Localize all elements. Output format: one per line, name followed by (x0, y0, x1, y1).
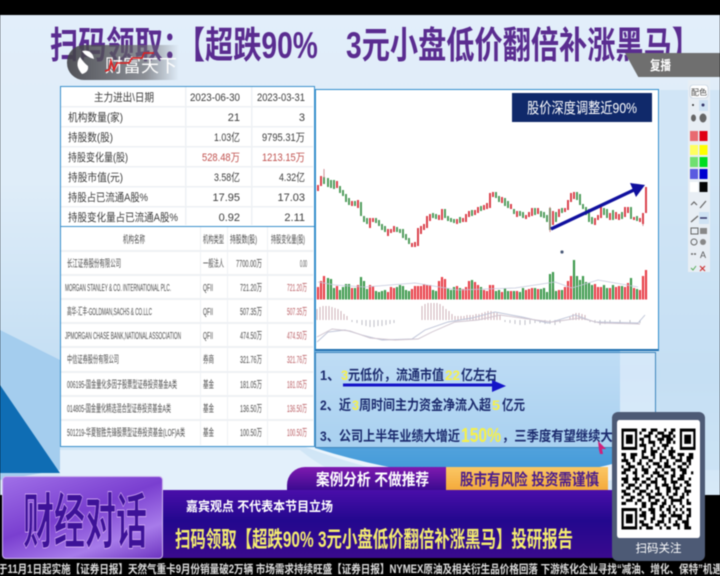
table: holdings summary: 9795.31万 (262, 132, 305, 144)
table: holdings summary: 持股占已流通A股% (68, 190, 148, 204)
table: holdings summary: 持股变化量(股) (68, 150, 128, 164)
tab: risk warning (446, 467, 608, 490)
point 2: 2、近 (320, 397, 351, 413)
table: holdings summary: 持股市值(元) (68, 170, 123, 184)
tab: case analysis: 案例分析 不做推荐 (316, 470, 429, 489)
tab: case analysis (287, 467, 447, 490)
volume bars (318, 260, 646, 299)
candlestick chart (318, 168, 646, 246)
point 2: 亿元 (502, 397, 525, 413)
point 1: 元低价，流通市值 (348, 367, 444, 383)
table: institution list: 507.35万 (240, 307, 262, 318)
small marker (560, 250, 563, 253)
table: institution list: 机构名称 (123, 233, 145, 246)
table: institution list: 501219-华夏智胜先锋股票型证券投资基金(LOF)A类 (67, 426, 185, 439)
replay tag (625, 53, 720, 77)
table: institution list: 014805-国金量化精选混合型证券投资基金A类 (67, 402, 171, 415)
point 3: 150% (461, 425, 501, 447)
QR caption: 扫码关注 (636, 543, 682, 555)
point 3 (320, 425, 625, 447)
table: institution list (60, 226, 315, 447)
table: holdings summary: 17.03 (277, 192, 305, 204)
table: institution list: 一般法人 (203, 257, 224, 270)
table: institution list: 基金 (203, 378, 214, 391)
drawing toolbar: A (700, 250, 706, 260)
table: holdings summary: 0.92 (219, 212, 240, 224)
table: holdings summary: 2023-03-31 (257, 92, 305, 104)
table: institution list: 基金 (203, 426, 214, 439)
table: holdings summary: 持股变化量占已流通A股% (68, 210, 178, 224)
table: institution list: QFII (203, 307, 213, 318)
table: holdings summary: 1213.15万 (262, 152, 305, 164)
banner disclaimer: 嘉宾观点 不代表本节目立场 (186, 499, 333, 514)
QR code (616, 419, 701, 539)
table: institution list: 321.76万 (240, 355, 262, 366)
watermark logo: 财富天下: 财富天下 (105, 56, 177, 76)
drawing toolbar: 配色 (691, 87, 707, 97)
table: institution list: 高华-汇丰-GOLDMAN,SACHS & CO.LLC (67, 305, 152, 318)
chart heading: 股价深度调整近90% (526, 100, 636, 116)
table: holdings summary: 2.11 (284, 212, 305, 224)
table: holdings summary: 机构数量(家) (68, 110, 123, 124)
table: institution list: 721.20万 (240, 283, 262, 294)
drawing toolbar (688, 80, 710, 272)
table: holdings summary: 3.58亿 (214, 171, 240, 184)
MACD indicator (316, 302, 644, 342)
table: institution list: 136.50万 (240, 404, 262, 415)
table: holdings summary: 主力进出\日期 (94, 90, 154, 104)
table: holdings summary: 1.03亿 (214, 131, 240, 144)
point 1: 3 (341, 367, 348, 383)
table: institution list: 474.50万 (240, 331, 262, 342)
table: institution list: JPMORGAN CHASE BANK,NATIONAL ASSOCIATION (65, 331, 181, 342)
point 2: 周时间主力资金净流入超 (359, 397, 491, 413)
table: holdings summary: 持股数(股) (68, 130, 113, 144)
table: institution list: 基金 (203, 402, 214, 415)
table: institution list: 006195-国金量化多因子股票型证券投资基金A类 (67, 378, 177, 391)
table: holdings summary: 21 (228, 112, 240, 124)
table: institution list: 券商 (203, 353, 214, 366)
chart heading (512, 92, 652, 122)
panel: stock chart (315, 89, 659, 351)
table: institution list: 7700.00万 (236, 259, 262, 270)
program logo (2, 476, 163, 559)
point 1 (320, 367, 497, 383)
table: holdings summary (60, 86, 315, 227)
underline arrow (343, 380, 506, 392)
point 1: 1、 (320, 367, 340, 383)
point 2: 5 (492, 397, 500, 413)
callout: key points (315, 352, 656, 448)
table: institution list: 持股数(股) (230, 233, 257, 246)
table: holdings summary: 528.48万 (202, 152, 240, 164)
point 2: 3 (352, 397, 359, 413)
table: holdings summary: 4.32亿 (279, 171, 305, 184)
replay tag: 复播 (650, 58, 671, 73)
banner (160, 490, 620, 558)
watermark logo: 财富天下 (67, 45, 179, 80)
top black bar (0, 0, 720, 15)
table: holdings summary: 2023-06-30 (190, 92, 240, 104)
table: institution list: QFII (203, 331, 213, 342)
table: institution list: 100.50万 (240, 428, 262, 439)
table: institution list: MORGAN STANLEY & CO. INTERNATIONAL PLC. (65, 283, 171, 294)
point 1: 亿左右 (461, 367, 497, 383)
QR code card (612, 412, 705, 561)
table: institution list: 长江证券股份有限公司 (67, 257, 121, 270)
table: holdings summary: 17.95 (212, 192, 240, 204)
trend arrow (550, 182, 644, 228)
table: holdings summary: 3 (299, 112, 305, 124)
table: institution list: 中信证券股份有限公司 (67, 353, 119, 366)
point 3: 3、公司上半年业绩大增近 (320, 428, 460, 444)
table: institution list: QFII (203, 283, 213, 294)
table: institution list: 机构类型 (203, 233, 224, 246)
cursor (597, 441, 606, 455)
table: institution list: 181.05万 (240, 380, 262, 391)
point 3: ，三季度有望继续大涨 (502, 428, 625, 444)
point 1: 22 (445, 367, 460, 383)
